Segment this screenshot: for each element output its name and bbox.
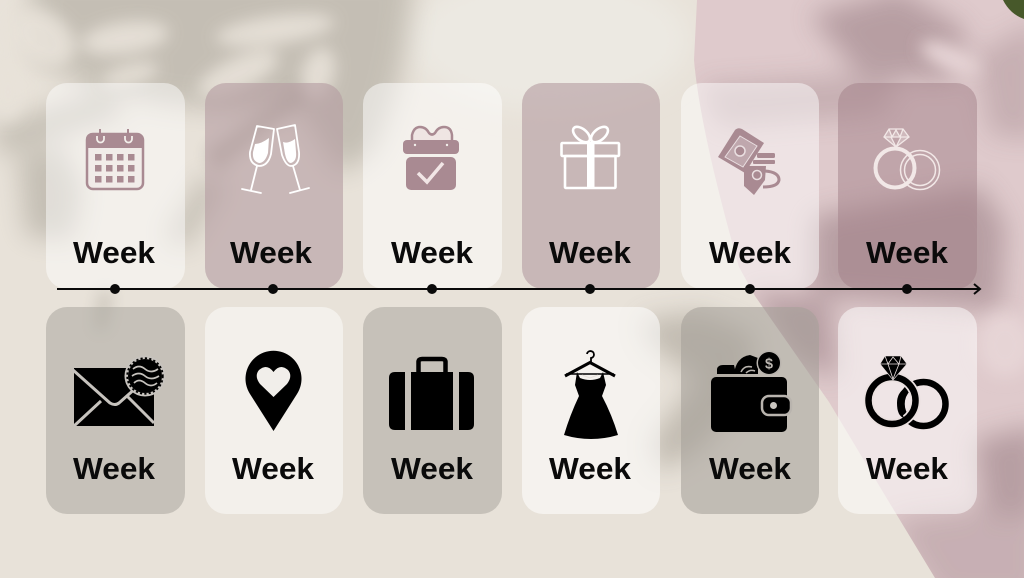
icon: gift box	[562, 124, 619, 189]
icon: sealed envelope	[73, 356, 166, 426]
icon: wedding rings solid	[868, 356, 946, 426]
panel: top card 2	[205, 83, 343, 289]
label: Week	[230, 235, 313, 270]
panel: bottom card 4	[522, 307, 660, 514]
label: Week	[709, 235, 792, 270]
label: Week	[73, 235, 156, 270]
label: Week	[391, 451, 474, 486]
panel: top card 3	[363, 83, 502, 289]
icon: dress on hanger	[564, 351, 618, 439]
icon: heart pin	[246, 351, 302, 431]
icon: wedding rings outline	[876, 129, 940, 190]
label: Week	[391, 235, 474, 270]
icon: money envelopes	[718, 128, 779, 195]
timeline arrow	[57, 284, 980, 294]
panel: top card 6	[838, 83, 977, 289]
panel: bottom card 5	[681, 307, 819, 514]
leaf shadows: top left	[0, 0, 415, 250]
label: Week	[549, 235, 632, 270]
label: Week	[709, 451, 792, 486]
panel: bottom card 6	[838, 307, 977, 514]
panel: top card 5	[681, 83, 819, 289]
panel: top card 4	[522, 83, 660, 289]
label: Week	[866, 235, 949, 270]
panel: bottom card 3	[363, 307, 502, 514]
icon: wallet with coins: $	[765, 356, 774, 372]
leaf shadows: right	[700, 0, 1024, 578]
icon: champagne flutes	[242, 125, 309, 193]
icon: gift calendar check	[403, 127, 459, 190]
icon: calendar	[86, 129, 143, 189]
icon: wallet with coins	[711, 350, 791, 432]
panel: bottom card 2	[205, 307, 343, 514]
label: Week	[549, 451, 632, 486]
icon: suitcase	[389, 359, 474, 430]
label: Week	[866, 451, 949, 486]
panel: bottom card 1	[46, 307, 185, 514]
panel: top card 1	[46, 83, 185, 289]
label: Week	[73, 451, 156, 486]
label: Week	[232, 451, 315, 486]
icon: corner leaf	[1003, 0, 1024, 19]
